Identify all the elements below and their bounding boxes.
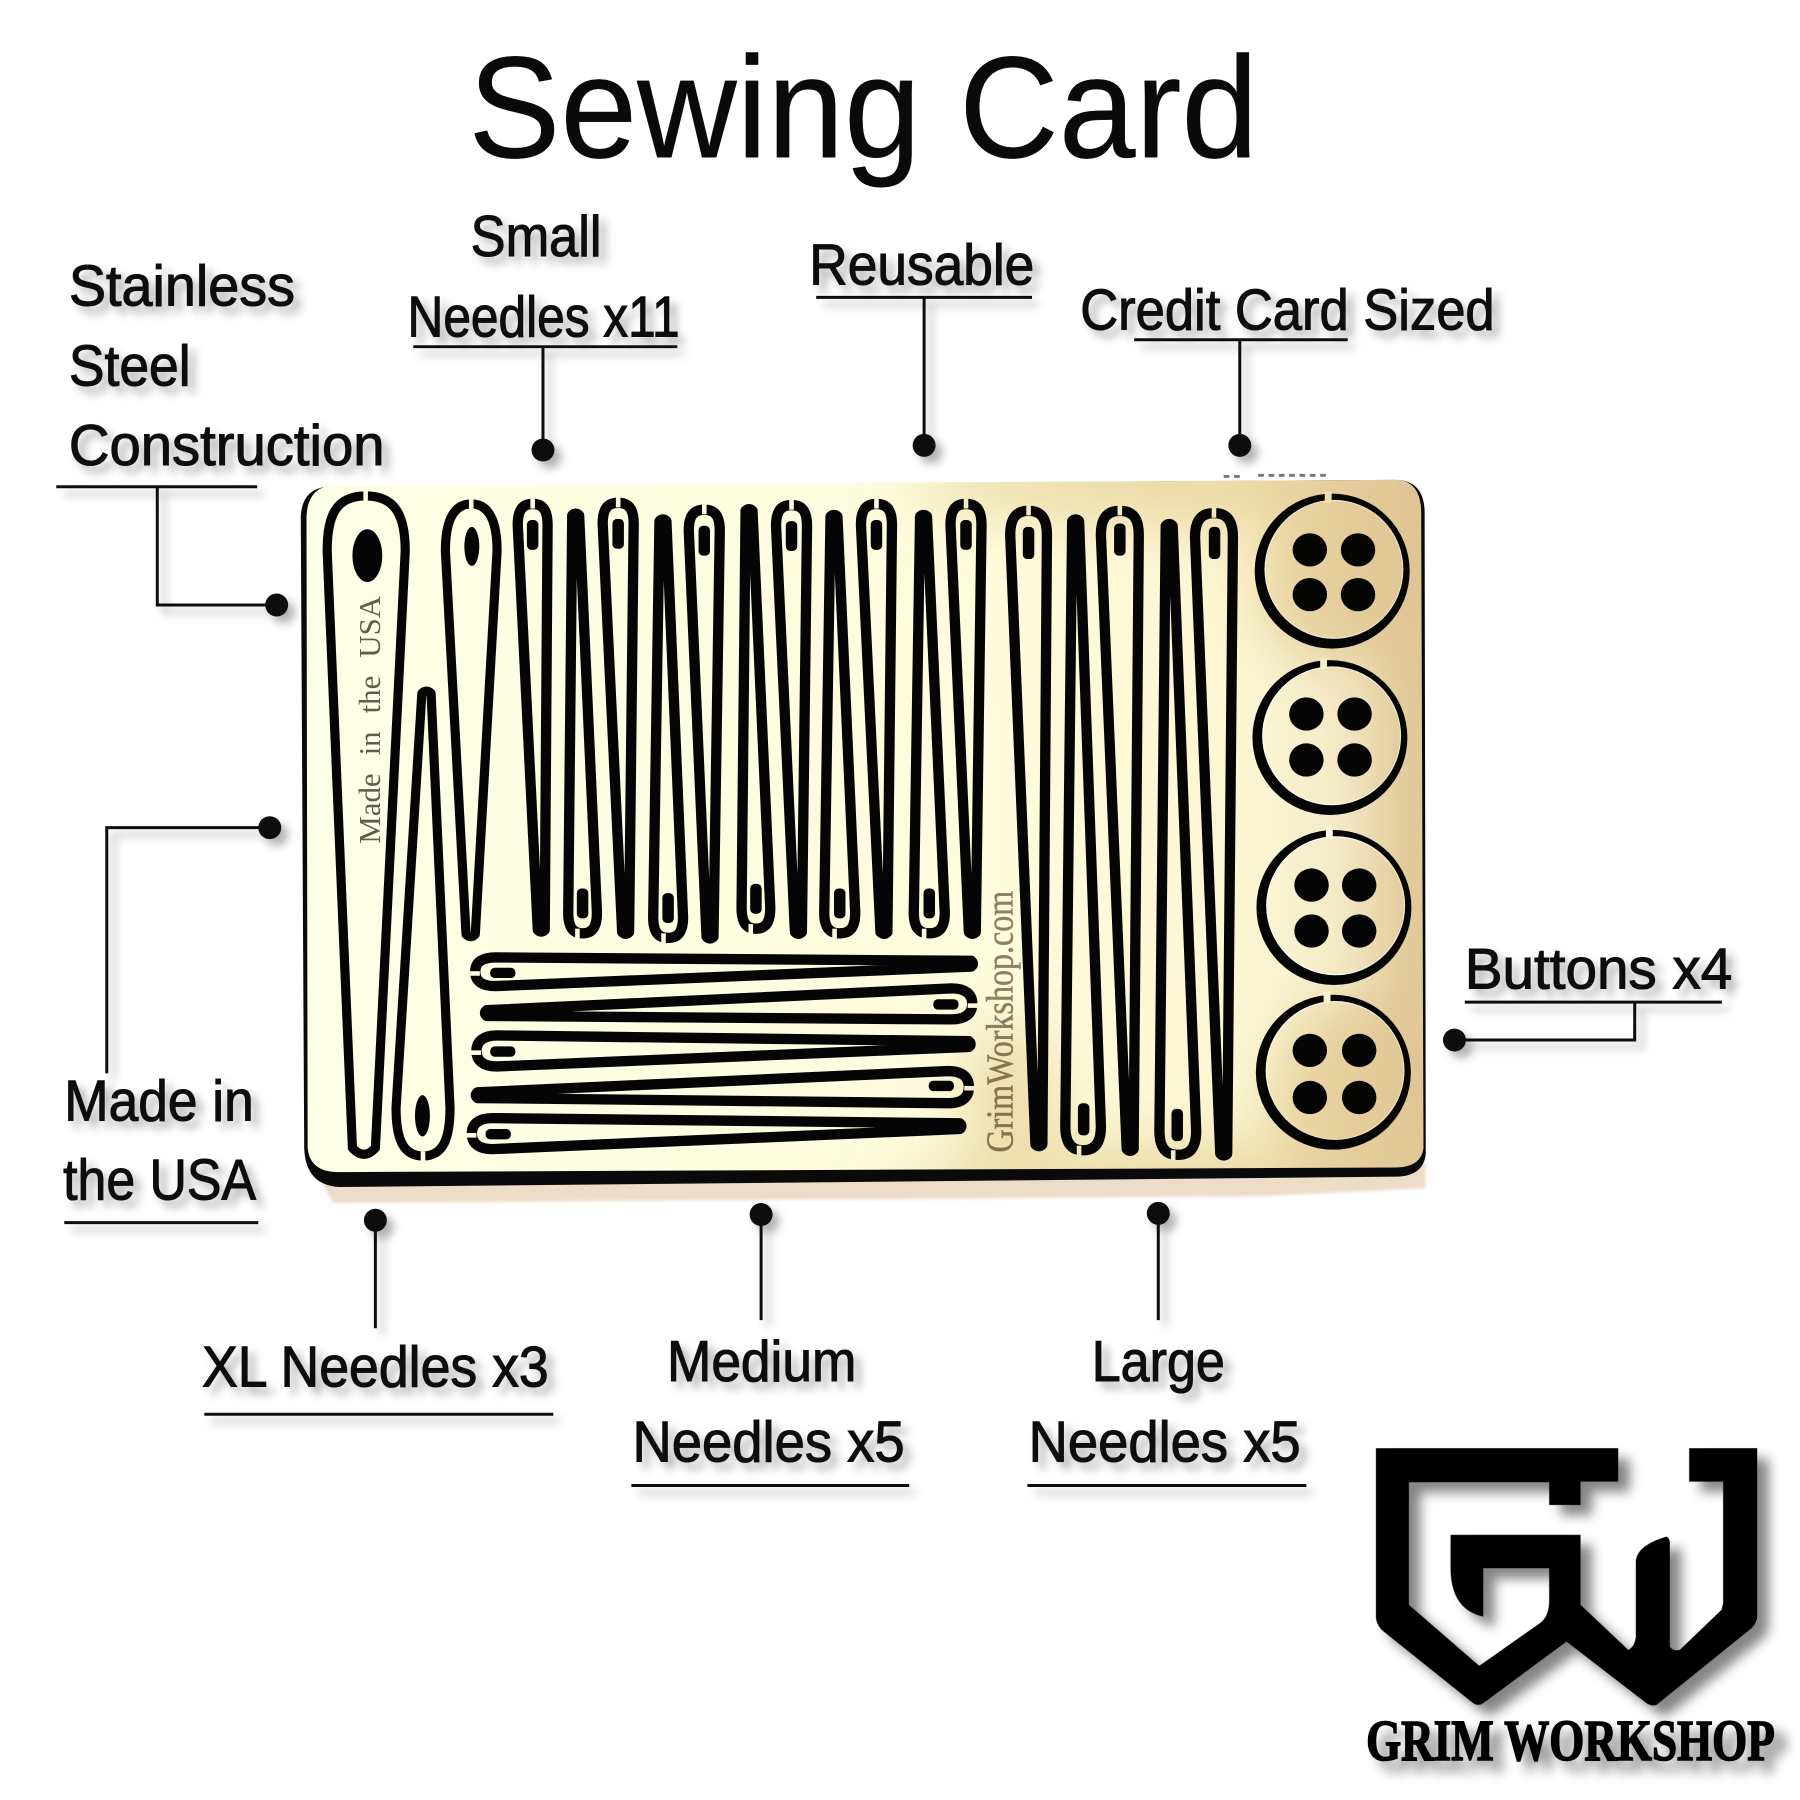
- callout: medium needles x5: Medium: [667, 1330, 856, 1394]
- XL needle 2: [445, 498, 497, 937]
- button 3: [1256, 828, 1411, 985]
- medium needle 1: [470, 957, 973, 986]
- medium needle 4: [476, 1071, 975, 1103]
- button 2: [1252, 658, 1407, 815]
- title: Sewing Card: [468, 26, 1258, 188]
- callout: buttons x4: [1443, 937, 1732, 1052]
- large needle 5: [1195, 506, 1233, 1155]
- callout: large needles x5: Needles x5: [1029, 1410, 1301, 1474]
- buttons: [1252, 491, 1411, 1150]
- small needle 5: [689, 503, 720, 938]
- small needles: [518, 496, 982, 945]
- engraved text: GrimWorkshop.com: GrimWorkshop.com: [980, 891, 1022, 1153]
- callout: credit card sized: [1080, 278, 1495, 457]
- callout: large needles x5: [1027, 1202, 1306, 1485]
- callout: stainless steel construction: Construction: [69, 414, 385, 478]
- callout: stainless steel construction: Stainless: [69, 254, 295, 318]
- callout: made in the USA: [63, 816, 281, 1223]
- callout: reusable: [809, 234, 1034, 457]
- medium needle 2: [485, 988, 978, 1019]
- medium needle 3: [471, 1035, 971, 1066]
- callout: small needles x11: Needles x11: [408, 285, 680, 349]
- callout: made in the USA: the USA: [63, 1149, 257, 1213]
- XL needle 3: [396, 691, 450, 1162]
- large needle 1: [1010, 504, 1047, 1146]
- callout: small needles x11: Small: [471, 205, 602, 269]
- small needle 2: [568, 514, 597, 940]
- callout: XL needles x3: [202, 1209, 553, 1414]
- small needle 3: [603, 496, 634, 934]
- XL needle 1: [327, 490, 405, 1154]
- callout: large needles x5: Large: [1092, 1330, 1225, 1394]
- callout: medium needles x5: Needles x5: [633, 1410, 905, 1474]
- button 4: [1256, 992, 1411, 1150]
- callout: small needles x11: [408, 205, 680, 461]
- panel: steel sewing card: [300, 474, 1428, 1204]
- medium needles: [466, 957, 978, 1149]
- engraved text: Made in the USA: Made in the USA: [352, 595, 387, 844]
- small needle 11: [951, 497, 982, 934]
- callout: reusable: Reusable: [809, 234, 1034, 298]
- callout: XL needles x3: XL Needles x3: [202, 1336, 549, 1400]
- callout: stainless steel construction: Steel: [69, 335, 191, 399]
- button 1: [1255, 491, 1410, 649]
- small needle 6: [742, 509, 770, 936]
- large needle 4: [1159, 524, 1196, 1162]
- logo mark: GW shield: [1376, 1448, 1757, 1705]
- large needle 3: [1101, 504, 1139, 1151]
- small needle 10: [914, 515, 945, 940]
- large needle 2: [1065, 519, 1101, 1157]
- small needle 1: [518, 497, 548, 932]
- logo: Grim Workshop: [1366, 1448, 1775, 1773]
- callout: buttons x4: Buttons x4: [1465, 937, 1732, 1001]
- small needle 8: [824, 515, 855, 940]
- small needle 7: [776, 498, 807, 934]
- large needles: [1010, 504, 1233, 1162]
- callout: made in the USA: Made in: [64, 1069, 254, 1133]
- callout: medium needles x5: [631, 1203, 909, 1485]
- callout: stainless steel construction: [56, 254, 385, 616]
- XL needles: [327, 490, 497, 1162]
- small needle 4: [653, 519, 683, 945]
- small needle 9: [861, 497, 892, 934]
- callout: credit card sized: Credit Card Sized: [1080, 278, 1495, 342]
- medium needle 5: [466, 1118, 961, 1149]
